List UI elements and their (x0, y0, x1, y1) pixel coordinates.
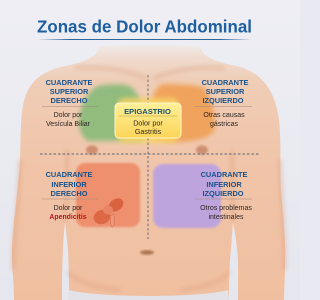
vertical dashed midline (147, 75, 149, 239)
horizontal dashed midline (40, 153, 259, 155)
icon: appendix (92, 196, 126, 227)
panel: lower right quadrant: Dolor por (54, 205, 83, 212)
zone: upper left quadrant, orange (152, 84, 215, 142)
panel: lower right quadrant: DERECHO (51, 189, 88, 198)
panel: upper right quadrant: Dolor por (54, 112, 83, 119)
zone: upper right quadrant, green (79, 84, 143, 141)
panel: upper left quadrant (195, 78, 252, 128)
panel: lower left quadrant: INFERIOR (206, 180, 242, 189)
panel: upper left quadrant: IZQUIERDO (202, 96, 244, 105)
panel: lower left quadrant: intestinales (208, 214, 244, 221)
panel: upper left quadrant: Otras causas (203, 112, 245, 119)
panel: lower left quadrant: Otros problemas (200, 205, 252, 212)
epigastrio glow (118, 98, 178, 143)
torso shading (13, 67, 285, 290)
panel: upper right quadrant: CUADRANTE (46, 78, 92, 87)
panel: epigastrio: Dolor por (133, 118, 163, 128)
panel: epigastrio: Gastritis (135, 127, 162, 136)
waistband (68, 290, 229, 300)
panel: lower left quadrant (195, 170, 252, 221)
panel: lower left quadrant: IZQUIERDO (202, 189, 244, 198)
right nipple (196, 145, 208, 155)
male torso figure (12, 45, 285, 300)
left nipple (86, 145, 98, 155)
panel: lower right quadrant: Apendicitis (49, 214, 87, 221)
title: Zonas de Dolor Abdominal (37, 16, 252, 36)
title underline (38, 39, 252, 40)
panel: epigastrio (115, 103, 181, 138)
panel: upper right quadrant: DERECHO (51, 96, 88, 105)
panel: epigastrio: EPIGASTRIO (124, 107, 171, 116)
panel: lower right quadrant: CUADRANTE (46, 170, 92, 179)
zone: lower left quadrant, purple (153, 164, 221, 228)
panel: lower left quadrant: CUADRANTE (201, 170, 247, 179)
panel: upper left quadrant: gástricas (210, 121, 239, 128)
panel: upper right quadrant (42, 78, 98, 128)
zone: lower right quadrant, red (76, 163, 140, 227)
panel: lower right quadrant (42, 170, 98, 221)
panel: upper left quadrant: SUPERIOR (206, 87, 245, 96)
panel: upper right quadrant: Vesícula Biliar (46, 121, 91, 128)
panel: upper left quadrant: CUADRANTE (202, 78, 248, 87)
panel: upper right quadrant: SUPERIOR (50, 87, 89, 96)
navel (140, 250, 154, 255)
panel: lower right quadrant: INFERIOR (51, 180, 87, 189)
